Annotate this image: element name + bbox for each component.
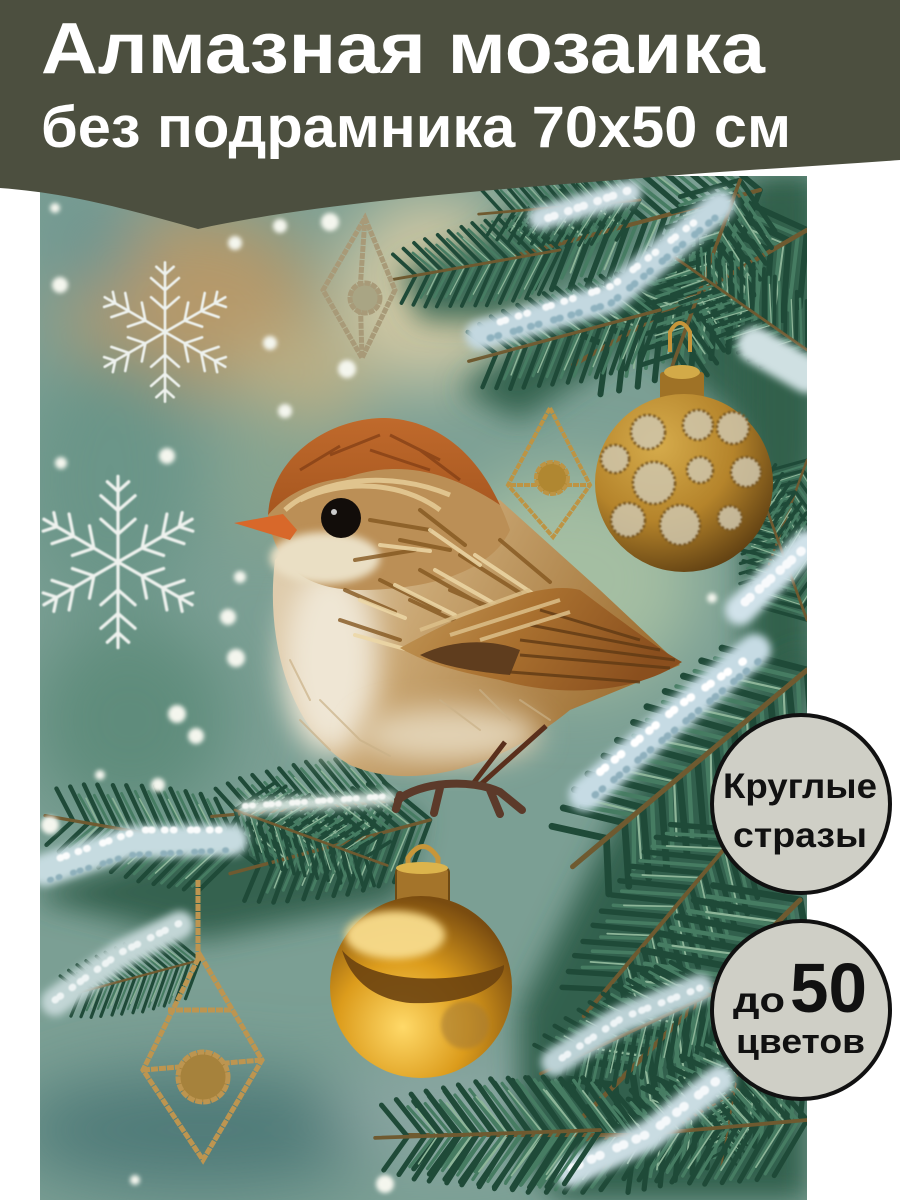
chest highlight xyxy=(282,565,378,755)
legs xyxy=(472,726,546,785)
gold bauble bottom xyxy=(330,846,512,1078)
eye glint xyxy=(331,509,337,515)
badge: up to 50 colours: до xyxy=(733,981,785,1020)
header banner xyxy=(0,0,900,229)
badge: up to 50 colours xyxy=(712,921,890,1099)
snowflake upper xyxy=(98,262,232,402)
snowflake lower xyxy=(35,476,201,648)
cap feather lines xyxy=(300,435,460,480)
upper right fir branch xyxy=(383,176,807,703)
bird xyxy=(234,418,682,814)
painted backdrop xyxy=(10,176,807,1200)
title line 1: Алмазная мозаика xyxy=(41,9,766,89)
gold bauble upper right xyxy=(595,323,773,572)
tail and body xyxy=(273,500,680,776)
snow on upper branch xyxy=(480,190,807,610)
lower right fir branches xyxy=(408,644,807,1200)
lower belly highlight xyxy=(360,707,540,763)
head xyxy=(268,418,510,590)
title line 2: без подрамника 70х50 см xyxy=(41,95,791,160)
wing feather lines xyxy=(510,610,675,682)
cap xyxy=(268,418,500,515)
small diamond ornament top xyxy=(323,218,395,358)
eye xyxy=(321,498,361,538)
breast feathers xyxy=(290,510,550,756)
foot xyxy=(396,784,522,814)
badge: round rhinestones xyxy=(712,715,890,893)
cheek xyxy=(270,532,380,584)
snow on lower right branches xyxy=(555,650,760,1172)
painting: bird with Christmas baubles xyxy=(40,176,807,1200)
wing xyxy=(400,588,682,690)
badge: round rhinestones: Круглые xyxy=(723,767,877,806)
badge: up to 50 colours: цветов xyxy=(736,1023,865,1061)
diamond ornament middle xyxy=(508,408,590,537)
diamond ornament bottom left xyxy=(143,880,262,1160)
brow stripes xyxy=(285,480,450,510)
beak xyxy=(234,514,297,540)
lower left fir branch xyxy=(37,754,602,1193)
badge: up to 50 colours: 50 xyxy=(790,949,867,1027)
snow on lower left branch xyxy=(45,796,390,1002)
wing shade xyxy=(420,642,520,675)
falling snow dots xyxy=(41,203,717,1193)
title xyxy=(41,9,791,160)
badge: round rhinestones: стразы xyxy=(733,816,867,855)
